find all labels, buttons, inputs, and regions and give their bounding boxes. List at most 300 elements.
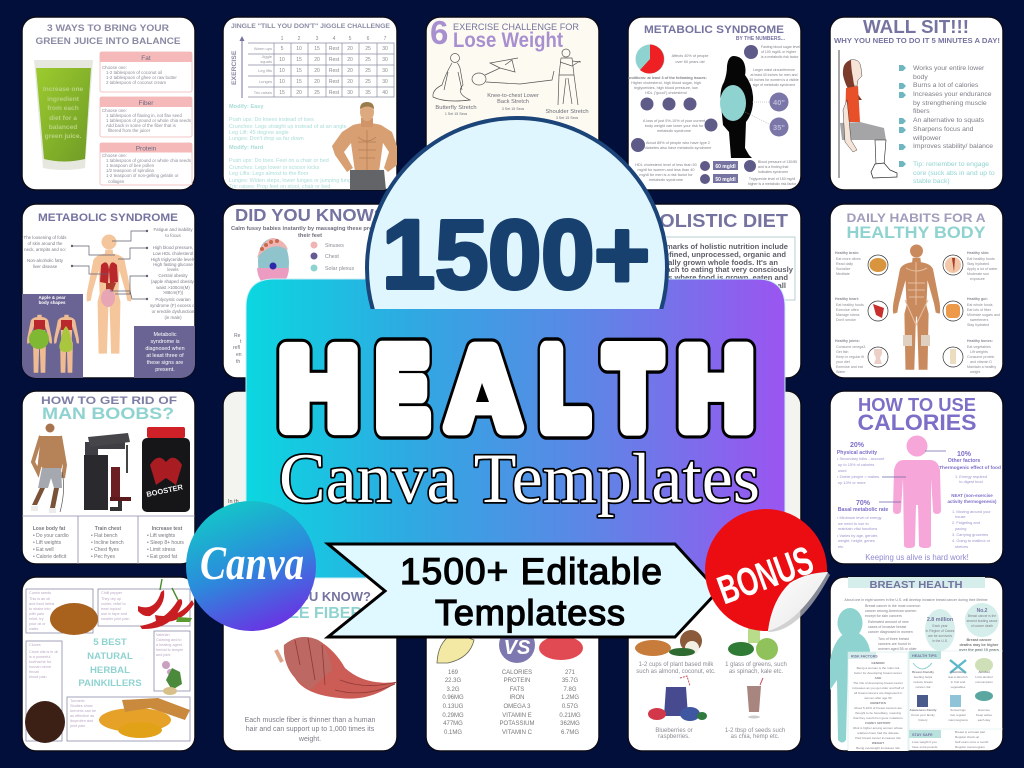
box: fat: Choose one: xyxy=(102,65,127,70)
text: herb notes: blood pain xyxy=(29,675,47,679)
text: right habits: Stay hydrated xyxy=(967,262,989,266)
heading: holistic diet: HOLISTIC DIET xyxy=(645,210,789,231)
figure: athlete xyxy=(31,424,65,513)
text: other factors: to digest food xyxy=(959,479,983,484)
text: milk and greens xyxy=(636,662,787,675)
text: herb notes: herbal to temple xyxy=(156,648,183,652)
heading: exercise challenge: Lose Weight xyxy=(453,29,563,52)
boxes: herb descriptions xyxy=(26,589,190,741)
table: exercise schedule: 30 xyxy=(382,46,388,52)
title: HEALTH: L xyxy=(541,325,588,452)
box: protein xyxy=(100,143,192,185)
text: modify easy: Leg Lift: 45 degree angle xyxy=(229,130,289,136)
text: left habits: Eat more olives xyxy=(836,257,861,261)
badge: BONUS sticker xyxy=(705,509,830,632)
text: herb notes: Valerian xyxy=(156,633,170,637)
box: risk factors: Past breast cancer increases risk xyxy=(855,736,901,740)
table: nutrition comparison: FATS xyxy=(510,687,524,693)
box: fiber: 1 tablespoon of ground or whole chia seeds xyxy=(106,118,192,123)
text: weight loss xyxy=(635,119,711,182)
heading: herbal painkillers: HERBAL xyxy=(90,665,130,676)
image: greens xyxy=(728,625,778,660)
text: weight loss: metabolic syndrome xyxy=(649,178,683,182)
icon: juice glass: diet for a xyxy=(49,115,77,122)
text: left habits: Manage stress xyxy=(836,313,860,317)
text: modify easy xyxy=(229,104,346,142)
list: neat: 1. Moving around your xyxy=(952,509,991,514)
callouts: right symptoms: High blood pressure, xyxy=(153,245,193,250)
list: benefits: stable back) xyxy=(913,178,950,185)
table: exercise schedule: 10 xyxy=(279,79,285,85)
text: right habits: exposure xyxy=(970,277,985,281)
icon: yellow food xyxy=(437,633,474,663)
title: HEALTH: A xyxy=(447,325,520,452)
text: basal metabolic rate: we need to use to xyxy=(838,521,869,526)
callouts: right symptoms: (apple shaped obesity: xyxy=(151,279,195,284)
table: nutrition comparison: POTASSIUM xyxy=(500,721,534,727)
icon: juice glass xyxy=(34,60,93,170)
list: benefits: Sharpens focus and xyxy=(913,126,974,133)
text: muscle fact xyxy=(245,717,375,743)
text: left habits: Socialize xyxy=(836,267,850,271)
text: herb notes: They dry up xyxy=(101,597,121,601)
panel: hidden card left: In th xyxy=(228,499,239,505)
table: exercise schedule: Rest xyxy=(329,79,340,85)
text: modify easy: Crunches: Legs straight up instead of at an angle xyxy=(229,124,346,130)
box: fiber: Add back in some of the fiber that is xyxy=(106,123,177,128)
table: exercise schedule: 1 xyxy=(281,36,284,42)
box: statistics xyxy=(909,730,989,749)
text: right column: Fasting blood sugar level xyxy=(761,45,800,49)
panel: metabolic syndrome by numbers card xyxy=(625,17,801,190)
text: basal metabolic rate: weight, height, genes xyxy=(838,538,875,543)
title: HEALTH: E xyxy=(377,327,428,452)
list: benefits: by strengthening muscle xyxy=(913,100,987,107)
box: risk factors: FAMILY HISTORY xyxy=(865,721,892,725)
text: health tips: Exercise xyxy=(978,708,990,712)
text: health tips: consumption xyxy=(975,680,993,684)
text: berries and seeds xyxy=(655,728,785,740)
table: nutrition comparison: 22.3G xyxy=(445,678,461,684)
text: modify hard: Crunches: Legs lower or scissor kicks xyxy=(229,165,319,171)
list: neat: 2. Fidgeting and xyxy=(952,520,980,525)
figure: woman wall sit xyxy=(839,50,897,178)
callouts: right symptoms: syndrome (F) excess or xyxy=(150,303,197,308)
box: protein: collagen xyxy=(108,179,125,184)
text: health tips: Alcohol xyxy=(978,670,990,674)
text: right habits: Lift weights xyxy=(970,350,988,354)
table: exercise schedule: 30 xyxy=(382,68,388,74)
table: exercise schedule: 5 xyxy=(281,46,284,52)
table: exercise schedule: 25 xyxy=(365,57,371,63)
image: almonds and coconut xyxy=(635,630,702,656)
box: fiber: Fiber xyxy=(139,100,154,107)
text: facts: cancer among American women xyxy=(865,609,916,613)
text: physical activity: • Zorbie people = makes xyxy=(837,474,879,479)
text: herb notes: toothache for xyxy=(29,660,52,664)
table: exercise schedule: 10 xyxy=(296,46,302,52)
box: risk factors: factor for developing breast cancer xyxy=(854,671,902,675)
text: muscle fact: Each muscle fiber is thinner than a human xyxy=(245,717,375,724)
text: right habits: Consume protein xyxy=(967,355,994,359)
text: right habits: and vitamin D xyxy=(970,360,992,364)
text: left habits: Exercise often xyxy=(836,308,859,312)
icon: chest machine xyxy=(84,433,131,511)
text: herb notes: Calming and to xyxy=(156,638,182,642)
box: holistic text: The hallmarks of holistic nutrition include xyxy=(637,242,788,251)
box: risk factors: women after age 50 xyxy=(864,696,892,700)
badge: BONUS sticker: BONUS xyxy=(712,538,819,613)
box: risk factors: Being overweight increases risk xyxy=(856,746,900,750)
callouts: left symptoms: Non-alcoholic fatty xyxy=(27,258,64,263)
text: berries and seeds: raspberries. xyxy=(658,734,690,740)
table: exercise schedule: 20 xyxy=(314,57,320,63)
text: facts xyxy=(865,604,920,651)
heading: wall sit xyxy=(834,17,1000,45)
table: exercise schedule: squats xyxy=(260,59,272,64)
list: benefits: core (suck abs in and up to xyxy=(913,170,995,177)
table: exercise schedule: 25 xyxy=(314,90,320,96)
badge: Canva logo: Canva xyxy=(200,537,304,590)
heading: exercise challenge: 6 xyxy=(430,14,448,51)
box: risk factors: increases as you get older and half of xyxy=(852,686,904,690)
table: exercise schedule: 15 xyxy=(314,46,320,52)
table: exercise schedule: Rest xyxy=(329,90,340,96)
label: butterfly xyxy=(435,105,477,116)
box: protein: 1/2 teaspoon of spirulina xyxy=(106,168,154,173)
text: herb notes: with pain xyxy=(29,612,44,616)
box: diagnosis note: these signs are xyxy=(147,360,183,366)
text: right column xyxy=(748,45,800,186)
text: left habits: Meditate xyxy=(836,272,850,276)
box: fiber: Choose one: xyxy=(102,108,127,113)
table: exercise schedule: 20 xyxy=(347,68,353,74)
text: affected: over 60 years old xyxy=(675,60,705,64)
table: three tips: • Eat good fat xyxy=(147,554,178,560)
text: massage intro: their feet xyxy=(298,233,322,239)
box: statistics: STAY SAFE xyxy=(912,733,933,737)
text: partial left column xyxy=(233,333,242,365)
icon: juice glass: balanced xyxy=(49,124,77,131)
text: screening: over the past 10 years xyxy=(959,648,999,652)
circle: 2.8 million: 2.8 million xyxy=(927,617,953,623)
text: modify hard: Modify: Hard xyxy=(229,145,264,151)
panel: hidden card right xyxy=(628,391,801,564)
text: berries and seeds: as chia, hemp etc. xyxy=(731,734,780,740)
text: herb notes: as effective as xyxy=(70,714,94,718)
panel: central gradient title panel xyxy=(246,279,785,578)
list: neat: house xyxy=(955,514,966,519)
figure: teal silhouette xyxy=(830,608,870,742)
table: nutrition comparison: 0.57G xyxy=(562,704,578,710)
image: cloves xyxy=(25,701,65,743)
text: health tips: in fruit and xyxy=(951,680,965,684)
panel: smoothie ingredients card xyxy=(628,577,801,751)
text: screening xyxy=(959,638,999,652)
text: left habits: Exercise and eat xyxy=(836,365,863,369)
table: exercise schedule: 5 xyxy=(349,36,352,42)
text: berries and seeds: 1-2 tbsp of seeds such xyxy=(725,728,785,734)
callouts: right symptoms: Fatigue and inability xyxy=(153,227,193,232)
text: right column: at least 40 inches for men and xyxy=(751,73,797,77)
text: right column: 35 inches for women is a visible xyxy=(749,78,799,82)
icon: juice glass: ingredient xyxy=(47,96,80,103)
text: health tips: feeding helps xyxy=(914,675,933,679)
text: health tips: cancer risk xyxy=(916,685,931,689)
table: three tips: • Limit stress xyxy=(147,547,176,553)
axis: exercise arrow: EXERCISE xyxy=(231,50,238,85)
table: exercise schedule: 20 xyxy=(296,90,302,96)
text: herb notes: turmeric can be xyxy=(70,709,96,713)
illustration: knee to chest stretch xyxy=(472,58,554,111)
table: exercise schedule: 6 xyxy=(367,36,370,42)
panel: herbal painkillers card xyxy=(22,577,195,751)
label: shoulder: Shoulder Stretch xyxy=(545,109,589,115)
text: modify hard: Push ups: Do toes. Feet on a chair or bed xyxy=(229,158,329,164)
text: health tips: Get regular xyxy=(950,713,966,717)
title: HEALTH xyxy=(279,325,753,452)
table: nutrition comparison: PROTEIN xyxy=(504,678,530,684)
heading: green juice xyxy=(36,24,180,44)
text: milk and greens: such as almond, coconut, etc. xyxy=(636,669,716,675)
list: benefits: Improves stability/ balance xyxy=(913,143,993,150)
banner: editable templates ribbon xyxy=(328,544,718,637)
text: right column: Triglyceride level of 150 mg/dl xyxy=(749,177,795,181)
text: herb notes: and joint xyxy=(156,653,171,657)
label: butterfly: Butterfly Stretch xyxy=(435,105,477,111)
table: nutrition comparison: 362MG xyxy=(560,721,580,727)
heading: challenge: JINGLE "TILL YOU DON'T" JIGGLE CHALLENGE xyxy=(231,23,390,30)
text: modify easy: Push ups: Do knees instead of toes xyxy=(229,117,314,123)
box: apple and pear body shapes xyxy=(22,294,83,378)
text: health tips: Breast-friendly xyxy=(912,670,934,674)
text: right habits: Eat lots of fiber xyxy=(967,308,992,312)
text: herb notes: Studies show xyxy=(70,704,93,708)
heading: green juice: GREEN JUICE INTO BALANCE xyxy=(36,36,181,47)
text: facts: Two of three breast xyxy=(878,637,909,641)
box: risk factors: thought to be hereditary, meaning xyxy=(855,711,901,715)
text: left habits: Healthy joints: xyxy=(835,339,860,343)
icons: health tips xyxy=(913,658,993,707)
table: nutrition comparison: 7.8G xyxy=(563,687,577,693)
text: herb notes: cooler, relief to xyxy=(101,602,126,606)
box: diagnosis note: at least three of xyxy=(146,353,184,359)
icon: juice glass: from each xyxy=(47,105,79,112)
text: modify hard: Leg Lifts: Legs almost to the floor xyxy=(229,171,309,177)
panel: wall sit card xyxy=(830,17,1003,190)
label: knee to chest xyxy=(487,93,539,111)
image: milkshake xyxy=(747,678,763,718)
table: exercise schedule: 20 xyxy=(314,68,320,74)
text: modify hard: Lunges: Widen steps, lower lunges or jumping lunges xyxy=(229,178,357,184)
list: benefits: body xyxy=(913,74,928,81)
text: right habits: Eat whole foods xyxy=(967,303,993,307)
text: right habits: Stay hydrated xyxy=(967,323,989,327)
image: cumin pile xyxy=(50,603,98,635)
text: left habits: Eat healthy foods xyxy=(836,303,864,307)
heading: man boobs xyxy=(41,395,177,423)
text: herb notes: to shake into xyxy=(29,607,51,611)
text: health tips: Screenings xyxy=(950,708,966,712)
heading: muscle fiber xyxy=(242,589,371,622)
box: risk factors: Risk is higher among women whose xyxy=(853,726,903,730)
box: risk factors: WEIGHT xyxy=(872,741,884,745)
title: HEALTH: H xyxy=(679,325,753,452)
table: three tips: • Do your cardio xyxy=(33,533,69,539)
text: affected: Affects 40% of people xyxy=(672,54,708,58)
box: statistics: Self exam once a month xyxy=(955,740,989,744)
text: herb notes: ibuprofen and xyxy=(70,719,93,723)
list: benefits: Increases your endurance xyxy=(913,91,992,98)
text: weight loss: About 85% of people who have type 2 xyxy=(646,141,710,145)
box: holistic text xyxy=(637,237,795,300)
icon: booster bottle: BOOSTER xyxy=(146,482,184,499)
box: risk factors: relatives have had the disease xyxy=(857,731,899,735)
text: basal metabolic rate: Basal metabolic rate xyxy=(838,507,888,513)
text: partial left column: en xyxy=(236,352,242,358)
box: fat: Fat xyxy=(141,55,151,62)
text: herb notes: treat topical xyxy=(101,607,121,611)
box: health tips: HEALTH TIPS xyxy=(912,654,937,658)
text: conditions: Conditions: at least 3 of the following issues: xyxy=(625,76,707,80)
table: three tips: • Sleep 8+ hours xyxy=(147,540,184,546)
box: diagnosis note: present. xyxy=(155,367,175,373)
box: fat: 1-2 tablespoon of coconut oil xyxy=(106,70,162,75)
text: right column: sign of metabolic syndrome xyxy=(753,83,795,87)
table: exercise schedule: 15 xyxy=(296,68,302,74)
table: nutrition comparison: 6.7MG xyxy=(561,730,579,736)
table: exercise schedule: Jiggle xyxy=(262,54,273,59)
circle: no 2: second leading cause xyxy=(967,619,998,623)
callouts: right symptoms: levels xyxy=(167,267,179,272)
text: right column: Larger waist circumference xyxy=(753,68,795,72)
text: other factors: 1. Energy required xyxy=(955,474,987,479)
text: right column: Blood pressure of 130/85 xyxy=(758,160,797,164)
box: statistics: Regular mammogram xyxy=(955,745,985,749)
box: statistics: have extra pounds xyxy=(912,745,938,749)
table: nutrition comparison: 0.13UG xyxy=(443,704,464,710)
text: left habits: Healthy heart: xyxy=(835,297,859,301)
heading: daily habits: HEALTHY BODY xyxy=(846,223,986,242)
list: benefits: Burns a lot of calories xyxy=(913,82,979,89)
table: exercise schedule: 25 xyxy=(365,79,371,85)
badge: 1500+ circle xyxy=(367,118,667,418)
text: herb notes: use in tape and xyxy=(101,612,127,616)
box: apple and pear body shapes: body shapes xyxy=(39,300,66,305)
heading: breast health: BREAST HEALTH xyxy=(870,580,962,591)
table: nutrition comparison: 0.1MG xyxy=(444,730,462,736)
text: herb notes: Cloves xyxy=(29,643,41,647)
table: nutrition comparison: IRON xyxy=(510,695,524,701)
text: basal metabolic rate: • Varies by age, gender, xyxy=(837,533,878,538)
text: herb notes: relief, try xyxy=(29,617,44,621)
panel: hidden card left xyxy=(223,391,397,564)
text: right habits: weight xyxy=(970,370,980,374)
circle: 2.8 million xyxy=(925,609,955,651)
heading: wall sit: WHY YOU NEED TO DO IT 5 MINUTES A DAY! xyxy=(834,38,1000,45)
text: basal metabolic rate: etc. xyxy=(838,544,844,549)
list: benefits: willpower xyxy=(912,135,942,142)
callouts: left symptoms: of skin around the xyxy=(28,241,63,246)
circle: no 2 xyxy=(965,603,999,637)
heading: metabolic numbers: BY THE NUMBERS... xyxy=(736,36,786,42)
table: nutrition comparison: OMEGA 3 xyxy=(503,704,531,710)
text: facts: cancers are found in xyxy=(878,642,911,646)
text: weight loss: body weight can lower your risk for xyxy=(645,124,704,128)
text: screening: deaths may be higher xyxy=(959,643,999,647)
table: nutrition comparison: 1.2MG xyxy=(561,695,579,701)
icon: meat xyxy=(539,636,583,660)
axis: exercise arrow xyxy=(231,36,244,98)
table: exercise schedule: 30 xyxy=(347,90,353,96)
list: benefits: fibers xyxy=(913,108,930,115)
pie chart: 40 percent xyxy=(636,44,664,74)
text: basal metabolic rate: maintain vital functions xyxy=(838,526,877,531)
label: knee to chest: Back Stretch xyxy=(497,99,529,105)
text: weight loss: diabetes also have metabolic syndrome xyxy=(645,146,711,150)
text: basal metabolic rate: • Minimum level of energy xyxy=(837,515,882,520)
text: weight loss: HDL cholesterol level of less than 50 xyxy=(635,163,697,167)
table: nutrition comparison: 0.96MG xyxy=(442,695,464,701)
table: exercise schedule: 30 xyxy=(382,57,388,63)
table: nutrition comparison: 169 xyxy=(448,670,459,676)
table: exercise schedule: 35 xyxy=(365,90,371,96)
heading: man boobs: HOW TO GET RID OF xyxy=(41,395,177,407)
text: conditions: HDL ("good") cholesterol xyxy=(645,91,687,95)
table: three tips: • Incline bench xyxy=(91,540,124,546)
text: left habits: Water xyxy=(836,370,846,374)
illustration: shoulder stretch xyxy=(545,49,589,120)
table: nutrition comparison: 35.7G xyxy=(562,678,578,684)
heading: herbal painkillers: NATURAL xyxy=(87,651,133,662)
text: conditions: triglycerides, high blood pressure, low xyxy=(634,86,698,90)
text: right column: is a metabolic risk factor xyxy=(761,55,799,59)
table: nutrition comparison: VITAMIN E xyxy=(502,713,532,719)
text: physical activity: Physical activity xyxy=(837,450,877,456)
table: exercise schedule: 15 xyxy=(296,57,302,63)
text: milk and greens: as spinach, kale etc. xyxy=(729,669,784,675)
callouts: left symptoms xyxy=(24,235,67,269)
text: left habits: Consume omega3 xyxy=(836,345,865,349)
text: right habits: Minimize sugars and xyxy=(967,313,1000,317)
panel: how to use calories card xyxy=(830,391,1003,564)
text: herb notes: your oil or xyxy=(29,622,46,626)
panel: green juice card xyxy=(22,17,195,190)
text: herb notes: This is an oil xyxy=(29,597,50,601)
box: fat: 1-2 tablespoon of ghee or raw butter xyxy=(106,75,177,80)
text: health tips xyxy=(910,670,993,722)
callouts: right symptoms: (in male) xyxy=(164,315,182,320)
icons: three conditions xyxy=(631,45,758,184)
title: HEALTH: H xyxy=(279,327,358,452)
text: partial left column: th xyxy=(236,359,240,365)
table: three tips: • Flat bench xyxy=(91,533,118,539)
panel: muscle fiber card xyxy=(223,577,397,751)
table: three tips: • Pec fryes xyxy=(91,554,115,560)
text: herb notes: Chilli pepper xyxy=(101,591,123,595)
text: weight loss: metabolic syndrome xyxy=(657,129,691,133)
text: right habits: Moderate sun xyxy=(967,272,989,276)
text: left habits: your diet xyxy=(836,360,850,364)
text: physical activity xyxy=(837,442,885,485)
text: left habits: Healthy brain: xyxy=(835,251,859,255)
text: right habits: Healthy skin: xyxy=(967,251,989,255)
box: risk factors: GENDER xyxy=(871,661,885,665)
title: HEALTH: T xyxy=(606,326,660,452)
table: three tips: • Chest flyes xyxy=(91,547,119,553)
table: exercise schedule: 15 xyxy=(279,90,285,96)
table: nutrition comparison: CALORIES xyxy=(502,670,532,676)
